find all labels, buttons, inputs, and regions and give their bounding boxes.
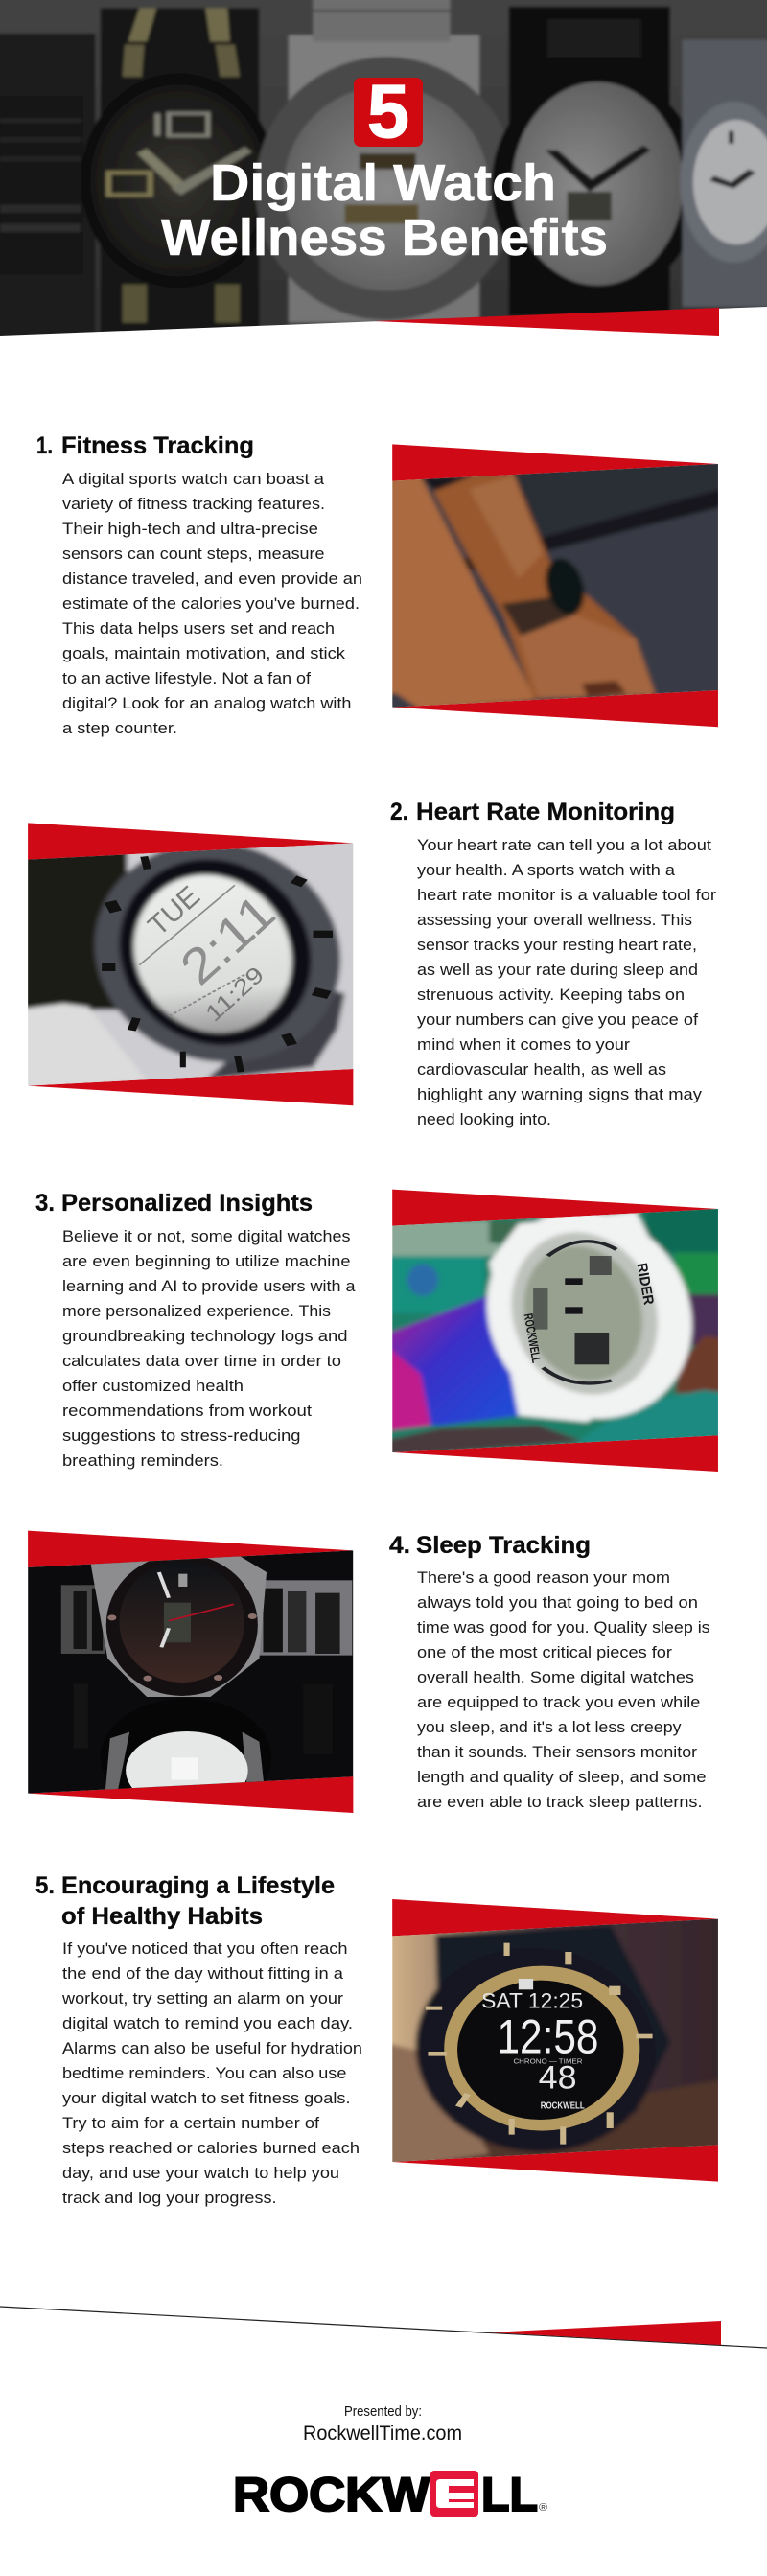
image 5: black and gold digital watch: ROCKWELL bbox=[541, 2101, 585, 2112]
heading 1: Fitness Tracking bbox=[61, 432, 254, 459]
heading 4: 4. bbox=[389, 1532, 410, 1559]
body text 2: your numbers can give you peace of bbox=[417, 1011, 698, 1029]
image 2: grey digital watch on snow: TUE bbox=[142, 880, 206, 942]
body text 3: groundbreaking technology logs and bbox=[62, 1328, 347, 1345]
body text 1: variety of fitness tracking features. bbox=[62, 496, 325, 513]
image 3: white digital watch with colourful strap: RIDER bbox=[634, 1262, 657, 1307]
body text 3: are even beginning to utilize machine bbox=[62, 1253, 351, 1270]
footer divider with red accent bbox=[0, 2307, 767, 2348]
body text 4: one of the most critical pieces for bbox=[417, 1644, 673, 1661]
header banner bbox=[0, 0, 767, 345]
body text 3: suggestions to stress-reducing bbox=[62, 1427, 301, 1445]
body text 2: heart rate monitor is a valuable tool for bbox=[417, 887, 717, 904]
body text 2: sensor tracks your resting heart rate, bbox=[417, 937, 697, 954]
body text 3 bbox=[62, 1228, 356, 1470]
panel: 2 heart rate monitoring bbox=[14, 799, 717, 1128]
body text 1: digital? Look for an analog watch with bbox=[62, 695, 351, 712]
body text 4: you sleep, and it's a lot less creepy bbox=[417, 1719, 682, 1736]
body text 1: goals, maintain motivation, and stick bbox=[62, 645, 346, 662]
body text 3: more personalized experience. This bbox=[62, 1303, 331, 1320]
body text 1: Their high-tech and ultra-precise bbox=[62, 521, 318, 538]
footer: website: RockwellTime.com bbox=[303, 2423, 462, 2445]
body text 4: than it sounds. Their sensors monitor bbox=[417, 1744, 698, 1761]
heading 2: 2. bbox=[390, 799, 408, 825]
body text 1: to an active lifestyle. Not a fan of bbox=[62, 670, 311, 687]
header red accent triangle bbox=[374, 308, 719, 336]
image 5: black and gold digital watch: SAT 12:25 bbox=[481, 1989, 583, 2013]
body text 2: highlight any warning signs that may bbox=[417, 1086, 703, 1103]
body text 5: workout, try setting an alarm on your bbox=[61, 1990, 344, 2007]
body text 2: need looking into. bbox=[417, 1111, 551, 1128]
body text 2: mind when it comes to your bbox=[417, 1036, 631, 1054]
body text 2: as well as your rate during sleep and bbox=[417, 962, 698, 979]
heading 3: Personalized Insights bbox=[61, 1190, 313, 1217]
body text 2: your health. A sports watch with a bbox=[417, 862, 676, 879]
body text 2: Your heart rate can tell you a lot about bbox=[417, 837, 711, 854]
heading 5: Encouraging a Lifestyle bbox=[61, 1872, 335, 1899]
body text 2: cardiovascular health, as well as bbox=[417, 1061, 666, 1079]
logo: Rockwell bbox=[233, 2468, 547, 2521]
body text 4: are equipped to track you even while bbox=[417, 1694, 700, 1711]
heading 5: 5. bbox=[35, 1872, 55, 1899]
image 4: steel watch with reflection bbox=[28, 1531, 353, 1817]
title: Digital Watch bbox=[210, 154, 556, 212]
footer: presented by: Presented by: bbox=[344, 2404, 422, 2420]
body text 5 bbox=[61, 1940, 362, 2207]
body text 1: sensors can count steps, measure bbox=[62, 545, 324, 563]
body text 1: A digital sports watch can boast a bbox=[62, 471, 325, 488]
body text 2: assessing your overall wellness. This bbox=[417, 912, 692, 929]
body text 4: time was good for you. Quality sleep is bbox=[417, 1619, 710, 1636]
image 5: black and gold digital watch: 12:58 bbox=[497, 2009, 598, 2063]
body text 5: digital watch to remind you each day. bbox=[62, 2015, 353, 2032]
body text 5: If you've noticed that you often reach bbox=[62, 1940, 347, 1958]
body text 5: Try to aim for a certain number of bbox=[62, 2115, 319, 2132]
image 5: black and gold digital watch: 48 bbox=[539, 2060, 577, 2097]
image 2: grey digital watch on snow bbox=[14, 823, 367, 1105]
body text 2: strenuous activity. Keeping tabs on bbox=[417, 986, 685, 1004]
body text 3: offer customized health bbox=[62, 1378, 244, 1395]
body text 1: This data helps users set and reach bbox=[62, 620, 335, 638]
body text 5: bedtime reminders. You can also use bbox=[62, 2065, 346, 2082]
body text 5: steps reached or calories burned each bbox=[62, 2140, 360, 2157]
body text 5: Alarms can also be useful for hydration bbox=[62, 2040, 362, 2057]
image 2: grey digital watch on snow: 11:29 bbox=[200, 962, 269, 1027]
body text 4: always told you that going to bed on bbox=[417, 1594, 698, 1612]
logo: Rockwell: ROCKW bbox=[233, 2468, 430, 2521]
body text 5: track and log your progress. bbox=[62, 2190, 276, 2207]
body text 1: a step counter. bbox=[62, 720, 177, 737]
body text 4: length and quality of sleep, and some bbox=[417, 1769, 706, 1786]
title: Wellness Benefits bbox=[161, 209, 608, 267]
body text 1 bbox=[62, 471, 362, 737]
body text 1: distance traveled, and even provide an bbox=[62, 570, 362, 588]
image 1: wrist with watch bbox=[382, 444, 729, 727]
logo: Rockwell: ® bbox=[539, 2502, 547, 2514]
heading 5: of Healthy Habits bbox=[61, 1903, 263, 1930]
panel: 1 fitness tracking bbox=[36, 432, 729, 737]
body text 2 bbox=[417, 837, 717, 1128]
body text 5: your digital watch to set fitness goals. bbox=[62, 2090, 351, 2107]
body text 3: learning and AI to provide users with a bbox=[62, 1278, 356, 1295]
title bbox=[161, 154, 608, 267]
body text 4: overall health. Some digital watches bbox=[417, 1669, 694, 1686]
icon: red number 5 badge bbox=[354, 68, 423, 153]
body text 4: are even able to track sleep patterns. bbox=[417, 1794, 702, 1811]
body text 4 bbox=[417, 1569, 710, 1811]
image 5: black and gold digital watch: CHRONO — TIMER bbox=[513, 2059, 582, 2066]
body text 4: There's a good reason your mom bbox=[417, 1569, 670, 1587]
icon: red number 5 badge: 5 bbox=[367, 68, 409, 153]
body text 3: breathing reminders. bbox=[62, 1452, 223, 1470]
panel: 3 personalized insights bbox=[35, 1190, 729, 1472]
logo: Rockwell: LL bbox=[481, 2468, 538, 2521]
heading 4: Sleep Tracking bbox=[416, 1532, 591, 1559]
body text 3: recommendations from workout bbox=[62, 1403, 312, 1420]
image 3: white digital watch with colourful strap bbox=[382, 1190, 729, 1472]
body text 3: calculates data over time in order to bbox=[62, 1353, 341, 1370]
panel: 4 sleep tracking bbox=[28, 1531, 710, 1817]
body text 3: Believe it or not, some digital watches bbox=[62, 1228, 351, 1245]
body text 5: day, and use your watch to help you bbox=[62, 2165, 339, 2182]
panel: 5 encouraging a lifestyle of healthy habits bbox=[35, 1872, 729, 2207]
heading 5 bbox=[35, 1872, 335, 1930]
header photo: row of watches bbox=[0, 0, 767, 345]
heading 2: Heart Rate Monitoring bbox=[416, 799, 675, 825]
heading 3: 3. bbox=[35, 1190, 55, 1217]
heading 1: 1. bbox=[36, 432, 53, 459]
body text 1: estimate of the calories you've burned. bbox=[62, 595, 360, 613]
image 3: white digital watch with colourful strap: ROCKWELL bbox=[522, 1312, 544, 1364]
image 2: grey digital watch on snow: 2:11 bbox=[171, 884, 286, 996]
image 5: black and gold digital watch bbox=[382, 1899, 729, 2182]
body text 5: the end of the day without fitting in a bbox=[62, 1965, 344, 1983]
